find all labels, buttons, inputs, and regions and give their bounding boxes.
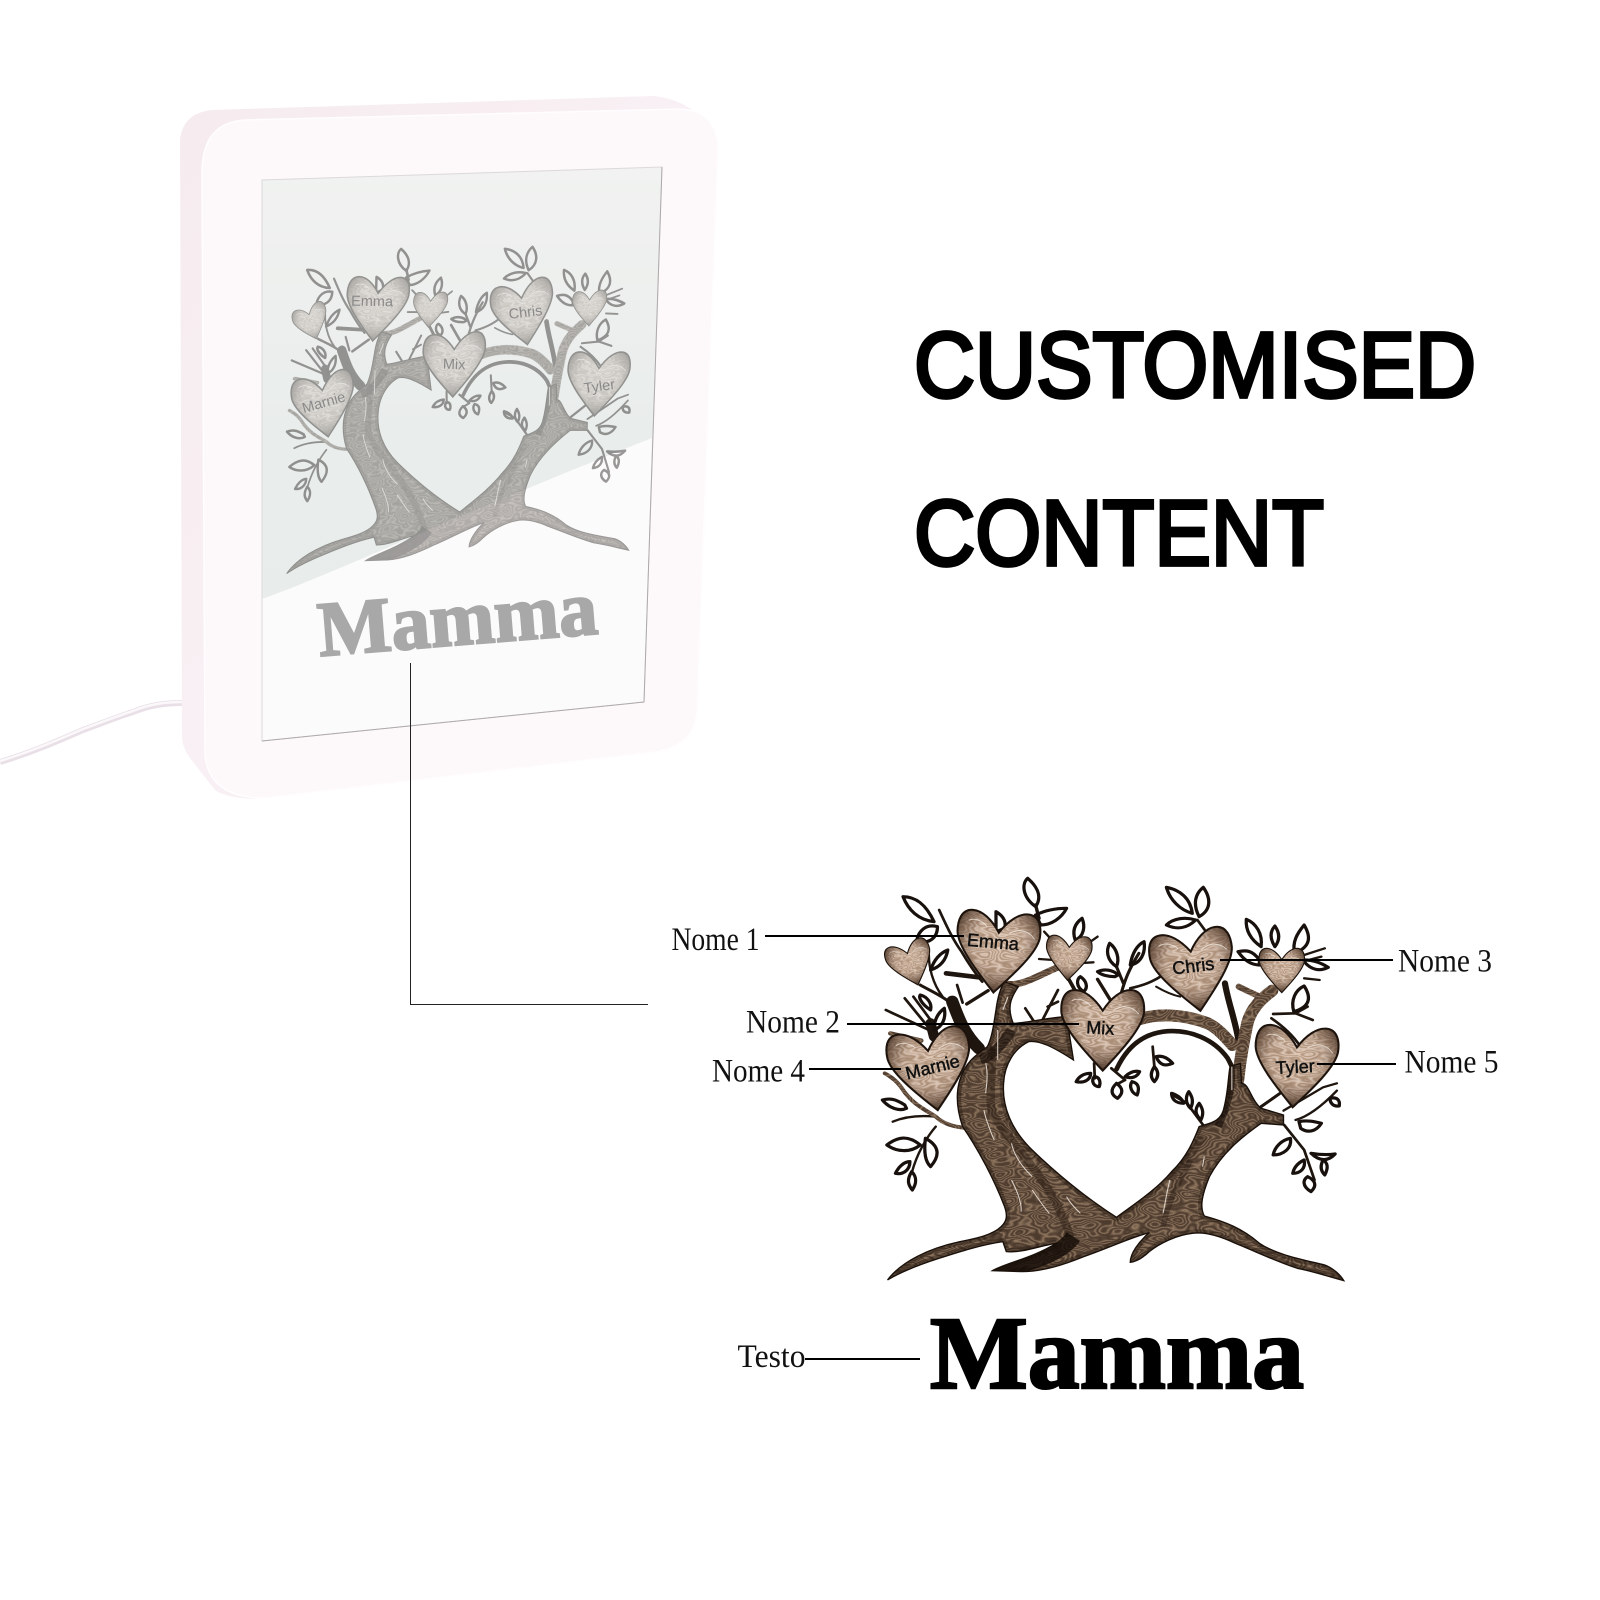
- headline: customised content: CONTENT: [914, 481, 1324, 585]
- engraved names on glass: [300, 294, 616, 417]
- callout: Nome 3: Nome 3: [1398, 944, 1492, 980]
- engraved names on glass: Chris: [508, 303, 543, 323]
- heart names: Chris: [1171, 954, 1215, 979]
- glass panel: [262, 167, 662, 741]
- engraved names on glass: Tyler: [583, 377, 616, 397]
- tree design with hearts: [882, 878, 1344, 1281]
- callout: Nome 1: Nome 1: [672, 922, 760, 958]
- text: Mamma: Mamma: [930, 1296, 1304, 1411]
- heart names: Emma: [966, 930, 1021, 954]
- headline: customised content: [914, 313, 1476, 585]
- heart names: [903, 930, 1315, 1084]
- heart names: Marnie: [903, 1051, 962, 1084]
- product: light frame: [180, 96, 718, 799]
- engraved names on glass: Emma: [351, 294, 394, 310]
- heart names: Tyler: [1275, 1056, 1315, 1078]
- engraved names on glass: Mix: [443, 357, 466, 373]
- engraved names on glass: Marnie: [300, 389, 347, 417]
- callout: Nome 4: Nome 4: [712, 1054, 805, 1090]
- callout: Nome 5: Nome 5: [1404, 1044, 1498, 1080]
- engraved text: Mamma: Mamma: [314, 564, 600, 673]
- power cable: [0, 702, 183, 762]
- heart names: Mix: [1086, 1017, 1115, 1039]
- callout: Nome 2: Nome 2: [746, 1004, 840, 1040]
- infographic canvas: [0, 96, 1498, 1390]
- headline: customised content: CUSTOMISED: [914, 313, 1476, 417]
- callout: Testo: Testo: [738, 1339, 806, 1375]
- connector from frame to design: [410, 663, 648, 1004]
- frame front face: [202, 109, 718, 798]
- frame side and back edge: [180, 96, 718, 799]
- engraved tree on glass: [283, 232, 638, 574]
